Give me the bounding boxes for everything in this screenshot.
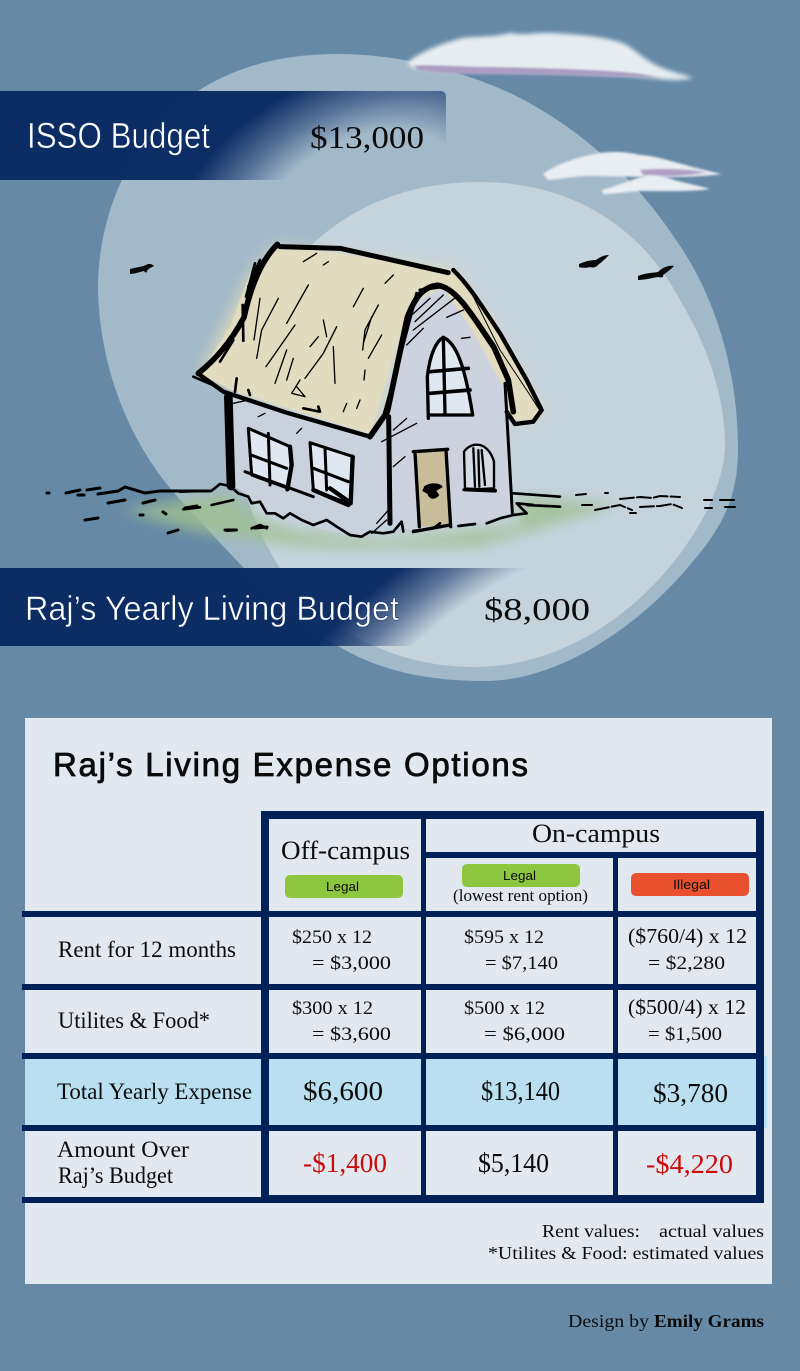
column header: on-campus legal: (lowest rent option) — [453, 886, 588, 905]
row: rent: $595 x 12 — [464, 927, 544, 948]
footnotes — [488, 1221, 764, 1263]
banner: ISSO budget — [0, 91, 446, 180]
upper arched window — [427, 337, 473, 418]
ground line in front of house — [180, 484, 403, 537]
illustration: house — [180, 244, 560, 537]
eave notes — [235, 378, 320, 412]
column header: off-campus — [281, 836, 410, 898]
value: 13,000: $13,000 — [310, 119, 424, 155]
cloud: large — [408, 33, 693, 80]
row: amount over budget: Amount Over — [57, 1137, 189, 1162]
column header: off-campus: Off-campus — [281, 836, 410, 865]
green ground wash — [120, 493, 620, 548]
footnotes: *Utilites & Food: estimated values — [488, 1243, 764, 1263]
roof outlines — [180, 244, 560, 537]
banner: Raj's budget — [0, 568, 611, 646]
roof scratches — [233, 253, 470, 533]
column header: on-campus legal: Legal — [503, 868, 536, 883]
roof — [200, 245, 543, 434]
row: total yearly expense — [57, 1076, 728, 1108]
inner moon blob — [235, 182, 725, 667]
row: rent: = $3,000 — [312, 953, 391, 974]
row: amount over budget: -$4,220 — [646, 1149, 733, 1179]
left wall — [230, 393, 391, 537]
row: utilities and food: = $3,600 — [312, 1024, 391, 1045]
badge: legal: Legal — [326, 879, 359, 894]
row: utilities and food — [58, 995, 746, 1045]
row: total yearly expense: $3,780 — [653, 1078, 728, 1108]
credit: Emily Grams — [654, 1311, 764, 1331]
row: amount over budget: Raj’s Budget — [58, 1163, 174, 1188]
row: amount over budget — [57, 1137, 733, 1188]
table grid — [22, 811, 764, 1203]
column header: on-campus illegal: Illegal — [673, 877, 710, 892]
row: rent: Rent for 12 months — [58, 937, 236, 962]
roof glow — [200, 245, 543, 433]
row: rent: = $2,280 — [648, 953, 725, 974]
door — [413, 450, 451, 527]
heading: Raj’s Living Expense Options — [53, 746, 528, 783]
row: total yearly expense: $13,140 — [481, 1076, 560, 1106]
row: rent: ($760/4) x 12 — [628, 924, 747, 948]
walls — [228, 397, 231, 486]
label: ISSO Budget: ISSO Budget — [27, 115, 210, 156]
small arched window — [463, 445, 494, 490]
right window — [310, 443, 353, 504]
label: Raj's Yearly Living Budget: Raj’s Yearly Living Budget — [25, 590, 400, 628]
column header: on-campus: On-campus — [532, 819, 660, 848]
row: utilities and food: = $6,000 — [484, 1024, 565, 1045]
row: total yearly expense: $6,600 — [303, 1076, 383, 1106]
birds — [130, 255, 674, 280]
credit — [568, 1311, 764, 1331]
row: utilities and food: $500 x 12 — [464, 998, 545, 1019]
column header: on-campus legal — [453, 864, 588, 905]
left window — [245, 428, 313, 497]
panel: living expense options — [22, 718, 772, 1284]
row: utilities and food: Utilites & Food* — [58, 1008, 210, 1033]
value: 8,000: $8,000 — [484, 591, 590, 627]
row: utilities and food: = $1,500 — [648, 1024, 722, 1045]
row: amount over budget: -$1,400 — [303, 1148, 387, 1178]
glass panes — [249, 337, 472, 502]
row: rent: = $7,140 — [485, 953, 558, 974]
row: total yearly expense: Total Yearly Expense — [57, 1079, 252, 1104]
footnotes: actual values — [659, 1221, 764, 1241]
column header: on-campus illegal — [631, 873, 749, 896]
outer moon blob — [98, 54, 738, 681]
row: rent — [58, 924, 747, 974]
cloud: middle — [543, 152, 722, 180]
credit: Design by — [568, 1311, 649, 1331]
ground dashes: left — [47, 487, 267, 533]
row: amount over budget: $5,140 — [478, 1148, 549, 1178]
ground dashes: right — [576, 493, 735, 513]
gable wall — [390, 288, 513, 530]
row: utilities and food: $300 x 12 — [292, 998, 373, 1019]
footnotes: Rent values: — [542, 1221, 640, 1241]
row: rent: $250 x 12 — [292, 927, 372, 948]
row: utilities and food: ($500/4) x 12 — [628, 995, 746, 1019]
cloud: small — [602, 175, 710, 194]
highlighted total row — [25, 1056, 767, 1128]
door lines — [413, 449, 451, 532]
